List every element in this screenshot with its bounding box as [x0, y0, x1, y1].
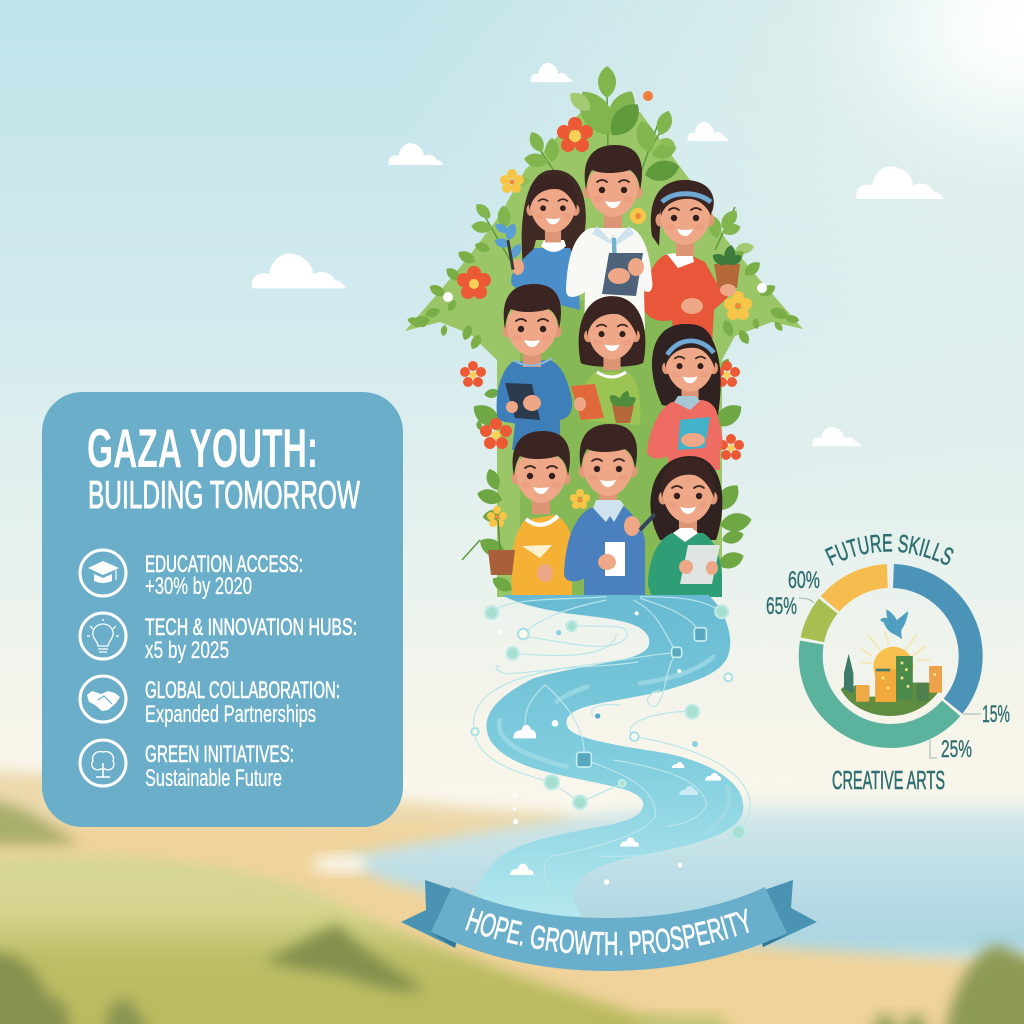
- person: bottom-centre boy: [564, 424, 655, 597]
- network nodes: [471, 605, 745, 885]
- item: education access: [80, 550, 303, 600]
- slope leaves: [407, 136, 800, 351]
- subtitle: BUILDING TOMORROW: [88, 474, 360, 517]
- label: 65%: 65%: [766, 593, 797, 620]
- donut segments: [811, 576, 971, 736]
- person: bottom-left boy: [511, 431, 572, 597]
- person: top-centre boy with tablet: [566, 145, 653, 330]
- item: green initiatives: Sustainable Future: [145, 765, 282, 792]
- chart title: FUTURE SKILLS: [824, 534, 954, 566]
- text: GREEN INITIATIVES:: [145, 741, 294, 768]
- person: middle-left boy: [497, 284, 572, 450]
- blue branch: [493, 221, 524, 260]
- person: top-right girl: [644, 180, 744, 345]
- river highlights: [499, 657, 729, 832]
- background: blurred coastal landscape: [0, 770, 1024, 1024]
- label: 25%: 25%: [941, 736, 972, 763]
- foliage base: [405, 66, 803, 597]
- icon: handshake: [80, 676, 126, 722]
- item: tech hubs: x5 by 2025: [145, 637, 229, 664]
- clouds: [252, 63, 944, 446]
- banner ribbon: [401, 880, 817, 971]
- illustration: arrow of foliage and youth: [405, 66, 803, 597]
- text: EDUCATION ACCESS:: [145, 551, 303, 578]
- text: TECH & INNOVATION HUBS:: [145, 614, 357, 641]
- river clouds: [510, 725, 721, 875]
- person: bottom-right girl: [648, 456, 722, 597]
- text: GLOBAL COLLABORATION:: [145, 677, 340, 704]
- river body: [475, 595, 743, 918]
- panel background: [42, 392, 403, 827]
- item: education access: +30% by 2020: [145, 573, 252, 600]
- network lines: [474, 597, 750, 913]
- panel: key stats: [42, 392, 403, 827]
- icon: tree: [80, 740, 126, 786]
- item: green initiatives: [80, 740, 294, 792]
- potted plant: [488, 520, 515, 575]
- ribbon tails: [401, 880, 817, 948]
- item: tech hubs: [80, 613, 357, 664]
- shaft leaves: [469, 357, 753, 595]
- item: global collaboration: [80, 676, 340, 728]
- label: 60%: 60%: [788, 567, 820, 594]
- person: middle-right girl: [647, 324, 723, 470]
- ribbon text: HOPE. GROWTH. PROSPERITY: [465, 908, 749, 956]
- centre emblem: dove and city: [841, 609, 942, 716]
- river with network: [471, 595, 750, 918]
- icon: graduation cap: [80, 550, 126, 596]
- title: GAZA YOUTH:: [87, 417, 318, 479]
- person: middle-centre girl with book and plant: [571, 296, 645, 425]
- icon: light bulb: [80, 613, 126, 659]
- person: top-left girl: [506, 170, 586, 310]
- flowers: [443, 91, 767, 527]
- branches: [462, 95, 735, 560]
- ribbon band: [431, 887, 787, 971]
- donut chart: future skills: [766, 534, 1010, 795]
- item: global collaboration: Expanded Partnerships: [145, 701, 316, 728]
